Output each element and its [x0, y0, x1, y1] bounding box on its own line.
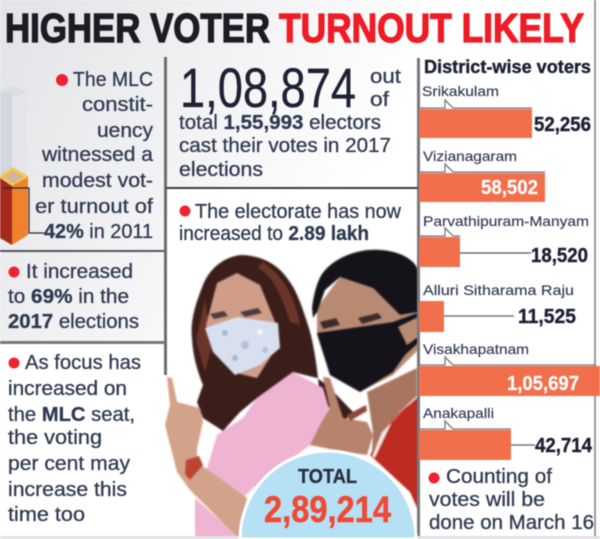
bar: Visakhapatnam: Visakhapatnam: [423, 341, 529, 357]
text block: MLC turnout in 2011: 42% in 2011: [44, 221, 153, 243]
bar: Vizianagaram: Vizianagaram: [423, 148, 517, 164]
callout: 1,08,874 votes cast: elections: [179, 159, 263, 181]
text block: increase to 69%: It increased: [26, 261, 133, 283]
right woman hand: [310, 377, 373, 455]
text block: focus on MLC seat: the MLC seat,: [8, 404, 135, 426]
right woman neck and collar: [367, 368, 417, 452]
bar: Parvathipuram-Manyam: Parvathipuram-Manyam: [423, 213, 589, 229]
bar: Anakapalli: [419, 405, 593, 460]
text block: MLC turnout in 2011: constit-: [82, 94, 153, 116]
text block: increase to 69%: [8, 261, 139, 333]
text block: focus on MLC seat: As focus has: [25, 352, 141, 374]
bar: Parvathipuram-Manyam: 18,520: [531, 245, 588, 267]
bar: Vizianagaram: 58,502: [481, 177, 538, 199]
left woman hair highlight: [196, 262, 300, 372]
left woman mask: [205, 317, 280, 375]
callout: 1,08,874 votes cast: of: [370, 89, 389, 111]
text block: MLC turnout in 2011: modest vot-: [42, 170, 153, 192]
text block: focus on MLC seat: time too: [8, 504, 85, 526]
text block: increase to 69%: to 69% in the: [8, 286, 129, 308]
callout: 1,08,874 votes cast: out: [370, 66, 401, 88]
text block: increase to 69%: 2017 elections: [8, 311, 139, 333]
text block: focus on MLC seat: increase this: [8, 479, 127, 501]
bar: Srikakulam: Srikakulam: [422, 83, 499, 99]
callout: total voters circle: TOTAL: [298, 466, 357, 488]
bar chart: district-wise voters: [419, 57, 600, 460]
text block: focus on MLC seat: the voting: [8, 427, 102, 449]
left woman pink top: [195, 372, 330, 539]
bar: Anakapalli: Anakapalli: [423, 405, 494, 421]
callout: 1,08,874 votes cast: total 1,55,993 electors: [179, 112, 381, 134]
bar: Parvathipuram-Manyam: [419, 213, 589, 267]
title: [5, 5, 584, 51]
left woman eyes: [210, 308, 262, 319]
bar: Vizianagaram: [419, 148, 545, 202]
text block: MLC turnout in 2011: witnessed a: [41, 144, 154, 166]
text block: focus on MLC seat: per cent may: [8, 453, 130, 475]
right woman black mask: [317, 313, 418, 392]
right woman thumb: [347, 405, 367, 421]
text block: MLC turnout in 2011: The MLC: [73, 69, 153, 91]
panel: photo of two women voters: [165, 250, 420, 539]
text block: counting date: done on March 16: [429, 512, 594, 534]
callout: 1,08,874 votes cast: [179, 56, 401, 181]
text block: electorate increased: [179, 201, 402, 245]
callout: 1,08,874 votes cast: cast their votes in 2017: [179, 135, 391, 157]
bar: Anakapalli: 42,714: [535, 435, 593, 457]
left woman bracelet: [185, 456, 203, 480]
right woman face: [317, 277, 418, 392]
left woman face: [206, 273, 278, 378]
text block: focus on MLC seat: [8, 352, 141, 526]
text block: focus on MLC seat: increased on: [8, 378, 127, 400]
text block: MLC turnout in 2011: uency: [97, 120, 153, 142]
text block: electorate increased: increased to 2.89 lakh: [179, 223, 369, 245]
bar: Visakhapatnam: [419, 341, 600, 396]
bar: Srikakulam: 52,256: [534, 114, 591, 136]
bar: Visakhapatnam: 1,05,697: [507, 373, 579, 395]
icon: ballot box turnout column: [0, 85, 44, 245]
text block: electorate increased: The electorate has now: [195, 201, 402, 223]
right woman eyes: [320, 313, 382, 329]
text block: counting date: [428, 466, 594, 534]
right woman red top: [370, 397, 418, 510]
text block: counting date: votes will be: [429, 489, 545, 511]
bar: Alluri Sitharama Raju: Alluri Sitharama Raju: [423, 282, 574, 298]
left woman hand and arm: [165, 377, 247, 539]
bar: Srikakulam: [419, 83, 591, 138]
right woman hair: [312, 250, 420, 318]
callout: total voters circle: 2,89,214: [264, 489, 391, 530]
left woman hair: [192, 255, 353, 431]
callout: 1,08,874 votes cast: 1,08,874: [180, 56, 356, 119]
title: HIGHER VOTER: [5, 5, 270, 51]
text block: MLC turnout in 2011: er turnout of: [35, 196, 153, 218]
chart heading: District-wise voters: [424, 57, 591, 77]
text block: MLC turnout in 2011: [35, 69, 154, 243]
bar: Alluri Sitharama Raju: [419, 282, 576, 332]
text block: counting date: Counting of: [446, 466, 552, 488]
callout: total voters circle: [240, 451, 416, 539]
bar: Alluri Sitharama Raju: 11,525: [518, 306, 576, 328]
